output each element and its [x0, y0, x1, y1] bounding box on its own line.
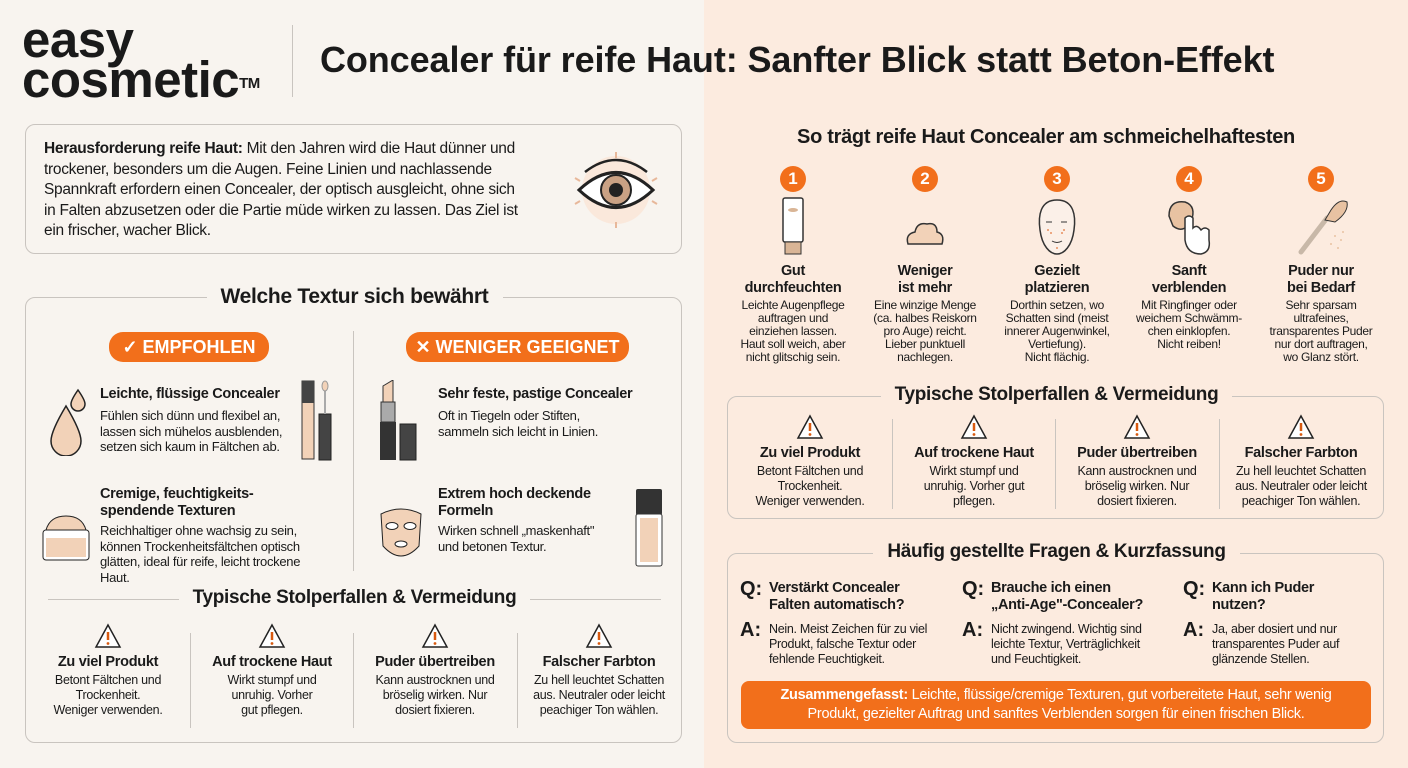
steps: Vertiefung).: [1028, 337, 1086, 351]
item: cremige: glätten, ideal für reife, leicht trockene: [100, 554, 300, 569]
panel: textures: Typische Stolperfallen & Vermeidung: [193, 587, 516, 608]
panel: pitfalls right: unruhig. Vorher gut: [924, 479, 1024, 493]
steps: wo Glanz stört.: [1283, 350, 1359, 364]
summary callout: Produkt, gezielter Auftrag und sanftes Verblenden sorgen für einen frischen Blick.: [808, 706, 1304, 722]
item: fluessige: Fühlen sich dünn und flexibel an,: [100, 408, 280, 423]
steps: Lieber punktuell: [885, 337, 965, 351]
steps: Leichte Augenpflege: [741, 298, 845, 312]
item: deckende: Wirken schnell „maskenhaft": [438, 523, 594, 538]
icon: jar: [42, 516, 90, 560]
faq 1: A:: [740, 619, 761, 641]
item: cremige: Cremige, feuchtigkeits-: [100, 486, 253, 502]
faq 2: und Feuchtigkeit.: [991, 652, 1081, 666]
steps: Dorthin setzen, wo: [1010, 298, 1104, 312]
heading: stolperfallen left: [48, 599, 661, 600]
intro text: in Falten abzusetzen oder die Partie müde wirken zu lassen. Das Ziel ist: [44, 202, 518, 218]
pitfalls left: bröselig wirken. Nur: [383, 688, 487, 702]
pitfalls left: gut pflegen.: [241, 703, 303, 717]
item: deckende: Extrem hoch deckende: [438, 486, 591, 502]
steps: bei Bedarf: [1287, 280, 1355, 296]
faq 2: [962, 578, 1143, 666]
steps: 1: [788, 169, 798, 188]
steps: nur dort auftragen,: [1274, 337, 1368, 351]
heading: textures: Welche Textur sich bewährt: [220, 285, 488, 308]
item: feste: Sehr feste, pastige Concealer: [438, 386, 632, 402]
steps: Gut: [781, 263, 805, 279]
intro text: ein frischer, wacher Blick.: [44, 222, 211, 239]
item: deckende: Formeln: [438, 503, 493, 519]
steps: Nicht reiben!: [1157, 337, 1221, 351]
steps: Haut soll weich, aber: [740, 337, 846, 351]
logo: easy: [22, 11, 133, 68]
panel: faq: [727, 553, 1384, 743]
intro text: trockener, besonders um die Augen. Feine Linien und nachlassende: [44, 160, 492, 178]
panel: textures: [25, 297, 682, 743]
steps: verblenden: [1152, 280, 1226, 296]
pitfalls left: Auf trockene Haut: [212, 654, 332, 670]
steps: [740, 166, 1373, 364]
item: feste: [380, 380, 632, 460]
item: cremige: spendende Texturen: [100, 503, 235, 519]
pitfalls left: Falscher Farbton: [543, 654, 655, 670]
panel: pitfalls right: Puder übertreiben: [1077, 445, 1197, 461]
panel: pitfalls right: Zu hell leuchtet Schatten: [1236, 464, 1366, 478]
steps: durchfeuchten: [745, 280, 841, 296]
faq 3: glänzende Stellen.: [1212, 652, 1309, 666]
icon: wand: [302, 380, 332, 460]
steps: 3: [1052, 169, 1062, 188]
pitfalls left: aus. Neutraler oder leicht: [533, 688, 665, 702]
pitfalls left: Zu hell leuchtet Schatten: [534, 673, 664, 687]
icon: drops: [50, 388, 86, 456]
faq 2: A:: [962, 619, 983, 641]
panel: pitfalls right: Kann austrocknen und: [1077, 464, 1197, 478]
faq 3: Q:: [1183, 578, 1205, 600]
panel: pitfalls right: Falscher Farbton: [1245, 445, 1357, 461]
steps: nachlegen.: [897, 350, 953, 364]
logo: cosmeticTM: [22, 51, 260, 108]
pitfalls left: Kann austrocknen und: [375, 673, 495, 687]
steps: einziehen lassen.: [749, 324, 837, 338]
faq 2: Nicht zwingend. Wichtig sind: [991, 622, 1142, 636]
steps: ultrafeines,: [1293, 311, 1349, 325]
panel: pitfalls right: Betont Fältchen und: [757, 464, 863, 478]
pitfalls left: Zu viel Produkt: [58, 654, 158, 670]
item: feste: sammeln sich leicht in Linien.: [438, 424, 598, 438]
item: fluessige: Leichte, flüssige Concealer: [100, 386, 280, 402]
pitfalls left: Wirkt stumpf und: [228, 673, 316, 687]
steps: Sehr sparsam: [1285, 298, 1357, 312]
item: fluessige: setzen sich kaum in Fältchen ab.: [100, 439, 280, 454]
summary callout: [741, 681, 1371, 729]
item: deckende: [380, 486, 662, 566]
panel: pitfalls right: Trockenheit.: [778, 479, 842, 493]
panel: pitfalls right: Zu viel Produkt: [760, 445, 860, 461]
faq 3: transparentes Puder auf: [1212, 637, 1339, 651]
item: deckende: und betonen Textur.: [438, 538, 546, 554]
steps: auftragen und: [758, 311, 828, 325]
steps: innerer Augenwinkel,: [1004, 324, 1110, 338]
summary callout: Zusammengefasst: Leichte, flüssige/cremige Texturen, gut vorbereitete Haut, sehr wenig: [780, 687, 1332, 703]
pill: empfohlen: [109, 332, 269, 362]
title: Concealer für reife Haut: Sanfter Blick statt Beton-Effekt: [320, 39, 1274, 80]
pitfalls left: Betont Fältchen und: [55, 673, 161, 687]
intro text: Herausforderung reife Haut: Mit den Jahren wird die Haut dünner und: [44, 140, 515, 157]
icon: mask: [380, 508, 422, 556]
panel: pitfalls right: [727, 396, 1384, 519]
steps: Sanft: [1172, 263, 1206, 279]
steps: pro Auge) reicht.: [884, 324, 966, 338]
faq 2: Q:: [962, 578, 984, 600]
panel: pitfalls right: Wirkt stumpf und: [930, 464, 1018, 478]
faq 2: „Anti-Age"-Concealer?: [991, 597, 1143, 613]
text: Typische Stolperfallen & Vermeidung: [895, 384, 1218, 405]
heading: steps: So trägt reife Haut Concealer am schmeichelhaftesten: [797, 126, 1295, 148]
faq 3: nutzen?: [1212, 597, 1265, 613]
item: cremige: [42, 486, 300, 584]
text: Häufig gestellte Fragen & Kurzfassung: [887, 541, 1226, 562]
steps: (ca. halbes Reiskorn: [873, 311, 977, 325]
item: feste: Oft in Tiegeln oder Stiften,: [438, 408, 580, 423]
steps: Puder nur: [1288, 263, 1354, 279]
icon: bottle: [636, 489, 662, 566]
panel: pitfalls right: Weniger verwenden.: [755, 494, 865, 508]
steps: Eine winzige Menge: [874, 298, 976, 312]
pill: weniger geeignet: [406, 332, 629, 362]
item: cremige: Reichhaltiger ohne wachsig zu sein,: [100, 523, 297, 538]
item: cremige: können Trockenheitsfältchen optisch: [100, 538, 300, 554]
pitfalls left: Puder übertreiben: [375, 654, 495, 670]
panel: pitfalls right: pflegen.: [953, 494, 995, 508]
faq 3: Ja, aber dosiert und nur: [1212, 622, 1337, 636]
pitfalls left: unruhig. Vorher: [232, 688, 312, 702]
steps: chen einklopfen.: [1148, 324, 1230, 338]
faq 2: leichte Textur, Verträglichkeit: [991, 637, 1140, 651]
steps: transparentes Puder: [1269, 324, 1373, 338]
faq 1: [740, 578, 927, 666]
panel: pitfalls right: Auf trockene Haut: [914, 445, 1034, 461]
item: fluessige: [50, 380, 332, 460]
steps: 2: [920, 169, 930, 188]
faq 1: Produkt, falsche Textur oder: [769, 637, 916, 651]
panel: pitfalls right: aus. Neutraler oder leicht: [1235, 479, 1367, 493]
panel: intro: [25, 124, 682, 254]
steps: platzieren: [1025, 280, 1089, 296]
steps: Mit Ringfinger oder: [1141, 298, 1237, 312]
intro text: [44, 140, 518, 239]
item: fluessige: lassen sich mühelos ausblenden,: [100, 424, 282, 438]
faq 3: A:: [1183, 619, 1204, 641]
steps: Weniger: [898, 263, 952, 279]
steps: 5: [1316, 169, 1326, 188]
faq 1: Nein. Meist Zeichen für zu viel: [769, 622, 927, 636]
faq 1: Q:: [740, 578, 762, 600]
steps: Gezielt: [1034, 263, 1080, 279]
steps: nicht glitschig sein.: [746, 350, 840, 364]
faq 1: fehlende Feuchtigkeit.: [769, 652, 885, 666]
faq 3: Kann ich Puder: [1212, 580, 1314, 596]
pitfalls left: Weniger verwenden.: [53, 703, 163, 717]
faq 1: Verstärkt Concealer: [769, 580, 900, 596]
intro text: Spannkraft erfordern einen Concealer, der optisch ausgleicht, ohne sich: [44, 181, 515, 198]
faq 3: [1183, 578, 1340, 666]
faq 1: Falten automatisch?: [769, 597, 904, 613]
panel: pitfalls right: peachiger Ton wählen.: [1242, 494, 1360, 508]
pitfalls left: dosiert fixieren.: [395, 703, 475, 717]
pitfalls left: Trockenheit.: [76, 688, 140, 702]
steps: Schatten sind (meist: [1006, 311, 1108, 325]
panel: pitfalls right: bröselig wirken. Nur: [1085, 479, 1189, 493]
pill: empfohlen: ✓ EMPFOHLEN: [122, 337, 256, 357]
pitfalls left: peachiger Ton wählen.: [540, 703, 658, 717]
steps: Nicht flächig.: [1025, 350, 1089, 364]
icon: lipstick: [380, 380, 416, 460]
icon: eye: [574, 152, 658, 228]
logo: [22, 11, 260, 108]
faq 2: Brauche ich einen: [991, 580, 1111, 596]
panel: pitfalls right: dosiert fixieren.: [1097, 494, 1177, 508]
steps: ist mehr: [898, 280, 952, 296]
pill: weniger geeignet: ✕ WENIGER GEEIGNET: [415, 337, 620, 357]
steps: 4: [1184, 169, 1194, 188]
item: cremige: Haut.: [100, 570, 130, 584]
pitfalls left: [53, 624, 666, 728]
steps: weichem Schwämm-: [1136, 311, 1242, 325]
